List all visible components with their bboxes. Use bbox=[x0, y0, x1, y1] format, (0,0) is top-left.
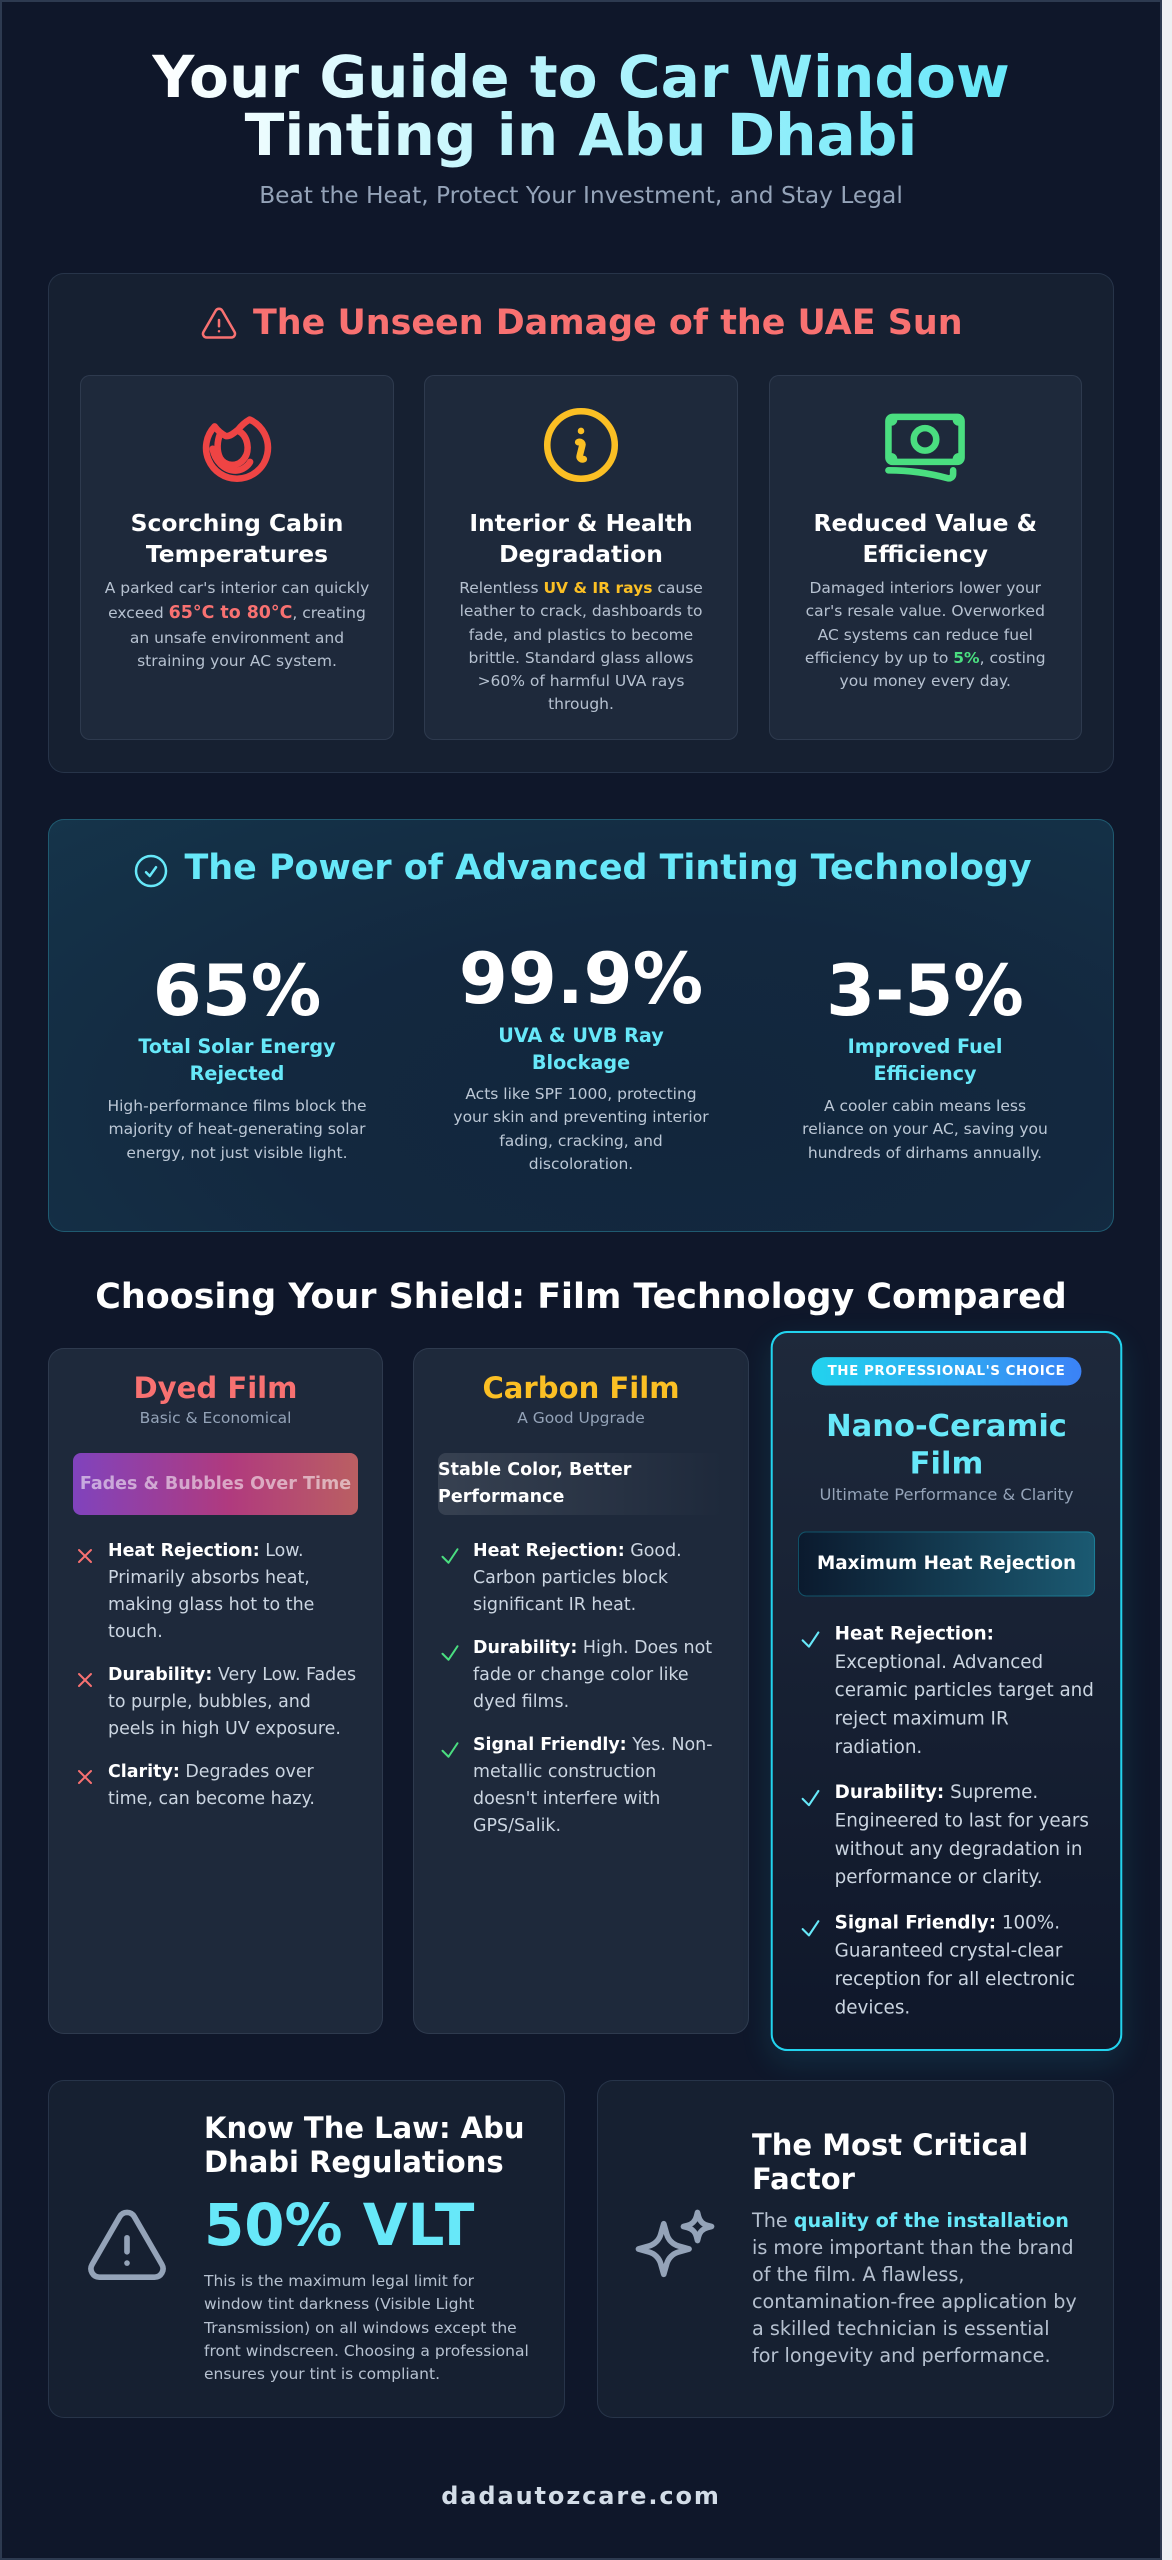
feature: heat rejection: Heat Rejection: Low. bbox=[108, 1541, 304, 1561]
card text: an unsafe environment and bbox=[130, 629, 344, 647]
card text: exceed 65°C to 80°C, creating bbox=[108, 603, 366, 623]
film tagline: Basic & Economical bbox=[140, 1409, 291, 1427]
feature: clarity: time, can become hazy. bbox=[108, 1789, 315, 1809]
film visual: clear strip bbox=[798, 1532, 1095, 1597]
stat number: 3-5% bbox=[826, 950, 1024, 1032]
card text: through. bbox=[548, 695, 614, 713]
feature: heat rejection bbox=[802, 1624, 1094, 1759]
panel: unseen damage of the sun bbox=[48, 273, 1114, 773]
film name: Film bbox=[910, 1446, 983, 1481]
icon: flame bbox=[202, 416, 272, 482]
feature: heat rejection: ceramic particles target and bbox=[835, 1681, 1094, 1702]
panel heading: Factor bbox=[752, 2162, 855, 2196]
feature: signal friendly bbox=[802, 1913, 1075, 2019]
feature: durability bbox=[441, 1638, 712, 1712]
feature: durability: without any degradation in bbox=[835, 1839, 1082, 1860]
feature: heat rejection bbox=[78, 1541, 314, 1642]
card heading: Degradation bbox=[499, 540, 663, 568]
card text bbox=[805, 579, 1046, 690]
feature list bbox=[441, 1541, 713, 1836]
feature: signal friendly: doesn't interfere with bbox=[473, 1789, 660, 1809]
legal limit figure: 50% VLT bbox=[204, 2191, 474, 2259]
feature: heat rejection: Heat Rejection: bbox=[835, 1624, 994, 1645]
panel text: front windscreen. Choosing a professional bbox=[204, 2342, 529, 2360]
card heading: Temperatures bbox=[146, 540, 328, 568]
card heading: Scorching Cabin bbox=[131, 508, 343, 536]
feature: durability: peels in high UV exposure. bbox=[108, 1719, 341, 1739]
card heading bbox=[813, 508, 1037, 568]
card text: fade, and plastics to become bbox=[469, 626, 693, 644]
icon: warning triangle bbox=[202, 308, 236, 339]
card heading: Interior & Health bbox=[469, 508, 693, 536]
feature: heat rejection: touch. bbox=[108, 1622, 163, 1642]
feature: signal friendly: Guaranteed crystal-clear bbox=[835, 1941, 1062, 1962]
panel text: ensures your tint is compliant. bbox=[204, 2365, 440, 2383]
card text: A parked car's interior can quickly bbox=[105, 579, 369, 597]
panel text: window tint darkness (Visible Light bbox=[204, 2295, 474, 2313]
stat label: Rejected bbox=[190, 1062, 284, 1085]
stat: 99.9 percent bbox=[453, 938, 709, 1173]
stat label: Total Solar Energy bbox=[138, 1035, 336, 1058]
card heading bbox=[131, 508, 343, 568]
card heading: Efficiency bbox=[862, 540, 988, 568]
stat label bbox=[848, 1035, 1002, 1085]
card text bbox=[459, 579, 703, 713]
feature: durability bbox=[78, 1665, 356, 1739]
card text: Relentless UV & IR rays cause bbox=[459, 579, 703, 597]
feature: heat rejection bbox=[442, 1541, 682, 1615]
card heading bbox=[469, 508, 693, 568]
feature: durability: performance or clarity. bbox=[835, 1868, 1043, 1889]
stat description: discoloration. bbox=[529, 1155, 633, 1173]
stat description: energy, not just visible light. bbox=[126, 1144, 348, 1162]
stat description: A cooler cabin means less bbox=[824, 1097, 1026, 1115]
card text: straining your AC system. bbox=[137, 652, 337, 670]
stat number: 65% bbox=[153, 950, 321, 1032]
feature: signal friendly: reception for all electronic bbox=[835, 1970, 1075, 1991]
stat description bbox=[802, 1097, 1048, 1162]
stat: 65 percent bbox=[107, 950, 367, 1162]
card: reduced value and efficiency bbox=[768, 375, 1082, 740]
film visual: clear strip: Maximum Heat Rejection bbox=[817, 1553, 1076, 1574]
feature: signal friendly: metallic construction bbox=[473, 1762, 656, 1782]
stat: 3-5 percent bbox=[802, 950, 1048, 1162]
film visual: faded strip: Fades & Bubbles Over Time bbox=[80, 1474, 351, 1494]
stat description bbox=[453, 1085, 709, 1173]
feature: durability: Durability: Very Low. Fades bbox=[108, 1665, 356, 1685]
stat description: reliance on your AC, saving you bbox=[802, 1120, 1048, 1138]
panel: carbon film bbox=[413, 1348, 749, 2034]
film visual: stable strip bbox=[438, 1453, 723, 1515]
feature: clarity bbox=[78, 1762, 315, 1809]
feature: signal friendly: devices. bbox=[835, 1998, 910, 2019]
stat description: your skin and preventing interior bbox=[453, 1108, 709, 1126]
panel text: contamination-free application by bbox=[752, 2290, 1077, 2313]
card text: efficiency by up to 5%, costing bbox=[805, 649, 1046, 667]
panel text: of the film. A flawless, bbox=[752, 2263, 964, 2286]
icon: check circle bbox=[134, 854, 168, 888]
panel text: for longevity and performance. bbox=[752, 2344, 1051, 2367]
panel heading bbox=[752, 2128, 1028, 2196]
film visual: stable strip: Stable Color, Better bbox=[438, 1460, 631, 1480]
stat label: UVA & UVB Ray bbox=[498, 1024, 664, 1047]
card text: leather to crack, dashboards to bbox=[460, 602, 702, 620]
card text: brittle. Standard glass allows bbox=[469, 649, 693, 667]
heading: unseen damage: The Unseen Damage of the UAE Sun bbox=[253, 303, 963, 343]
card heading: Reduced Value & bbox=[813, 508, 1037, 536]
panel: advanced tinting technology bbox=[48, 819, 1114, 1232]
title: Your Guide to Car Window bbox=[152, 43, 1010, 111]
stat label: Improved Fuel bbox=[848, 1035, 1002, 1058]
feature: durability: Durability: High. Does not bbox=[473, 1638, 712, 1658]
heading: film comparison: Choosing Your Shield: Film Technology Compared bbox=[95, 1277, 1067, 1317]
panel: nano-ceramic film bbox=[771, 1331, 1122, 2051]
film visual: stable strip: Performance bbox=[438, 1487, 564, 1507]
film name bbox=[826, 1408, 1067, 1481]
feature: durability: Durability: Supreme. bbox=[835, 1783, 1038, 1804]
title bbox=[152, 43, 1010, 169]
panel: dyed film bbox=[48, 1348, 383, 2034]
footer: website: dadautozcare.com bbox=[441, 2482, 721, 2510]
panel text: This is the maximum legal limit for bbox=[204, 2272, 474, 2290]
feature: durability: dyed films. bbox=[473, 1692, 569, 1712]
card text: car's resale value. Overworked bbox=[806, 602, 1045, 620]
feature: heat rejection: making glass hot to the bbox=[108, 1595, 314, 1615]
feature: signal friendly: Signal Friendly: Yes. Non- bbox=[473, 1735, 713, 1755]
stat description: hundreds of dirhams annually. bbox=[808, 1144, 1042, 1162]
subtitle: Beat the Heat, Protect Your Investment, and Stay Legal bbox=[259, 182, 903, 209]
stat description bbox=[107, 1097, 367, 1162]
card: scorching cabin temperatures bbox=[80, 375, 394, 740]
feature: heat rejection: Heat Rejection: Good. bbox=[473, 1541, 682, 1561]
film tagline: Ultimate Performance & Clarity bbox=[819, 1485, 1074, 1504]
feature list bbox=[802, 1624, 1094, 2019]
stat description: fading, cracking, and bbox=[499, 1132, 663, 1150]
feature: heat rejection: radiation. bbox=[835, 1738, 922, 1759]
badge: professional's choice: THE PROFESSIONAL'S CHOICE bbox=[828, 1363, 1065, 1379]
feature: heat rejection: Carbon particles block bbox=[473, 1568, 668, 1588]
card text: you money every day. bbox=[840, 672, 1011, 690]
panel heading bbox=[204, 2111, 525, 2179]
panel text: The quality of the installation bbox=[752, 2209, 1069, 2232]
stat description: High-performance films block the bbox=[107, 1097, 367, 1115]
feature: heat rejection: significant IR heat. bbox=[473, 1595, 636, 1615]
feature: durability: Engineered to last for years bbox=[835, 1811, 1089, 1832]
film name: Nano-Ceramic bbox=[826, 1408, 1067, 1444]
feature: durability bbox=[802, 1783, 1089, 1889]
panel: know the law bbox=[48, 2080, 565, 2418]
feature: signal friendly: Signal Friendly: 100%. bbox=[835, 1913, 1060, 1934]
panel text: is more important than the brand bbox=[752, 2236, 1074, 2259]
stat number: 99.9% bbox=[459, 938, 703, 1020]
icon: info circle bbox=[544, 408, 618, 482]
film visual: faded strip bbox=[73, 1453, 358, 1515]
feature: heat rejection: Primarily absorbs heat, bbox=[108, 1568, 310, 1588]
feature: durability: to purple, bubbles, and bbox=[108, 1692, 311, 1712]
panel heading: Know The Law: Abu bbox=[204, 2111, 525, 2145]
card: interior and health degradation bbox=[424, 375, 738, 740]
feature list bbox=[78, 1541, 356, 1809]
panel text: a skilled technician is essential bbox=[752, 2317, 1050, 2340]
stat description: Acts like SPF 1000, protecting bbox=[465, 1085, 697, 1103]
icon: warning triangle bbox=[88, 2210, 166, 2280]
badge: professional's choice bbox=[812, 1357, 1081, 1385]
feature: clarity: Clarity: Degrades over bbox=[108, 1762, 314, 1782]
stat label bbox=[498, 1024, 664, 1074]
heading: power of tinting: The Power of Advanced Tinting Technology bbox=[184, 848, 1032, 888]
feature: signal friendly: GPS/Salik. bbox=[473, 1816, 561, 1836]
panel text bbox=[204, 2272, 529, 2383]
panel text bbox=[752, 2209, 1077, 2367]
stat label: Efficiency bbox=[873, 1062, 976, 1085]
icon: sparkles bbox=[636, 2210, 714, 2278]
feature: heat rejection: Exceptional. Advanced bbox=[835, 1652, 1043, 1673]
panel heading: Dhabi Regulations bbox=[204, 2145, 504, 2179]
feature: signal friendly bbox=[442, 1735, 713, 1836]
panel text: Transmission) on all windows except the bbox=[204, 2318, 517, 2336]
stat label bbox=[138, 1035, 336, 1085]
card text: AC systems can reduce fuel bbox=[818, 626, 1033, 644]
stat label: Blockage bbox=[532, 1051, 630, 1074]
icon: banknote bbox=[885, 414, 965, 482]
stat description: majority of heat-generating solar bbox=[109, 1120, 365, 1138]
feature: durability: fade or change color like bbox=[473, 1665, 689, 1685]
film tagline: A Good Upgrade bbox=[517, 1409, 645, 1427]
card text: Damaged interiors lower your bbox=[809, 579, 1041, 597]
feature: heat rejection: reject maximum IR bbox=[835, 1709, 1009, 1730]
panel: most critical factor bbox=[597, 2080, 1114, 2418]
panel heading: The Most Critical bbox=[752, 2128, 1028, 2162]
film name: Carbon Film bbox=[482, 1371, 680, 1405]
film name: Dyed Film bbox=[134, 1371, 297, 1405]
title: Tinting in Abu Dhabi bbox=[245, 101, 917, 169]
card text bbox=[104, 579, 369, 670]
card text: >60% of harmful UVA rays bbox=[478, 672, 684, 690]
